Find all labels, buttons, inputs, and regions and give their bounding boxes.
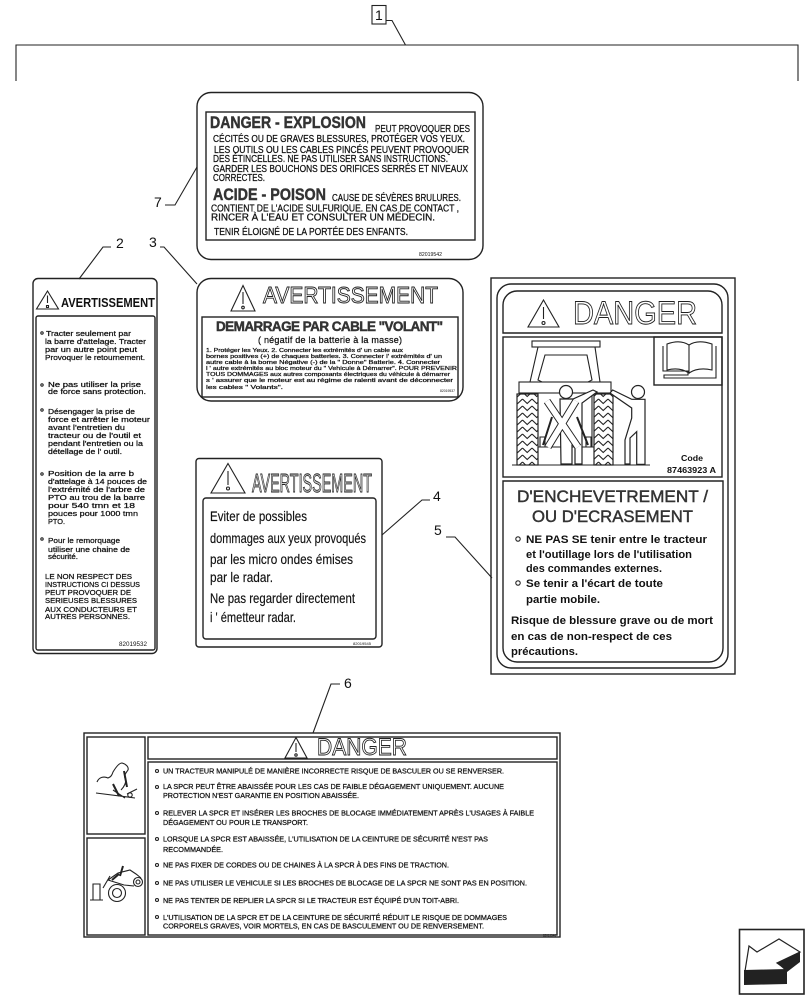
text block: radar warning [210,508,366,625]
part code: 82019545 [353,641,372,646]
text block: instructions: autre cable à la borne Négative (-) de la " Donne" Batterie. 4. Connecter [206,360,440,366]
text block: radar warning: i ' émetteur radar. [210,609,296,625]
text block: explosion warning: PEUT PROVOQUER DES [375,124,470,135]
part code: 82019537 [440,389,455,393]
icon: navigation arrow [740,930,804,994]
icon: warning triangle [528,300,559,327]
subheading: battery note: ( négatif de la batterie à la masse) [258,335,402,345]
callout: item 4 leader: 4 [433,488,441,504]
list: towing instructions: Position de la arre b [48,469,134,478]
list: rops instructions: PROTECTION N'EST GARANTIE EN POSITION ABAISSÉE. [163,791,359,800]
text block: consequence warning: SERIEUSES BLESSURES [45,596,137,605]
callout: item 4 leader [382,488,441,535]
list: towing instructions: l'extrémité de l'arbre de [48,485,145,494]
list: safety instructions: partie mobile. [526,594,600,606]
list: rops instructions: UN TRACTEUR MANIPULÉ DE MANIÈRE INCORRECTE RISQUE DE BASCULER OU SE RENVERSER. [163,766,504,776]
text block: radar warning: dommages aux yeux provoqués [210,530,366,546]
text panel: entanglement warning [503,481,723,662]
text block: explosion warning: GARDER LES BOUCHONS DES ORIFICES SERRÉS ET NIVEAUX [213,162,468,175]
list: towing instructions: tracteur ou de l'outil et [48,431,142,440]
callout: item 7 leader [154,167,197,210]
icon: warning triangle [285,738,307,758]
list: rops instructions [156,766,534,930]
list: rops instructions: LORSQUE LA SPCR EST ABAISSÉE, L'UTILISATION DE LA CEINTURE DE SÉCURITÉ N'EST PAS [163,834,488,844]
callout: item 1 with bracket: 1 [375,7,383,23]
list: towing instructions: d'attelage à 14 pouces de [48,477,147,486]
text block: risk statement: précautions. [511,646,578,658]
part code: 82019542 [419,252,442,258]
list: rops instructions: LA SPCR PEUT ÊTRE ABAISSÉE POUR LES CAS DE FAIBLE DÉGAGEMENT UNIQUEMENT. AUCUNE [163,782,504,791]
text block: acid warning: CAUSE DE SÉVÈRES BRULURES. [332,191,461,204]
text block: consequence warning: AUTRES PERSONNES. [45,612,130,621]
panel: label 5 danger entanglement [491,278,735,674]
callout: item 5 leader [434,522,492,578]
text block: instructions: TOUS DOMMAGES aux autres composants électriques du véhicule à démarrer [206,372,450,378]
text block: consequence warning: INSTRUCTIONS CI DESSUS [45,580,140,589]
list: rops instructions: RELEVER LA SPCR ET INSÉRER LES BROCHES DE BLOCAGE IMMÉDIATEMENT APRÈS L'USAGES À FAIBLE [163,808,534,818]
text block: consequence warning: LE NON RESPECT DES [45,572,132,581]
text block: explosion warning: LES OUTILS OU LES CABLES PINCÉS PEUVENT PROVOQUER [214,143,469,156]
callout: item 6 leader: 6 [344,675,352,691]
text block: risk statement: en cas de non-respect de ces [511,631,672,643]
text block: risk statement: Risque de blessure grave ou de mort [511,615,713,627]
icon: warning triangle [231,286,255,311]
list: towing instructions: PTO au trou de la barre [48,493,145,502]
heading: entanglement [517,487,708,526]
list: towing instructions: Pour le remorquage [48,536,120,545]
heading: avertissement outline: AVERTISSEMENT [252,468,372,498]
text block: consequence warning: AUX CONDUCTEURS ET [45,605,137,614]
panel: label 3 jump start [197,278,463,401]
list: safety instructions [516,534,708,606]
list: towing instructions: de force sans protection. [48,387,146,396]
text block: acid warning: CONTIENT DE L'ACIDE SULFURIQUE. EN CAS DE CONTACT , [211,204,459,214]
text block: explosion warning: CÉCITÉS OU DE GRAVES BLESSURES, PROTÉGER VOS YEUX. [213,132,465,145]
icon: tractor with rollbar [90,866,142,902]
text block: instructions: s ' assurer que le moteur est au régime de ralenti avant de déconnecter [206,378,453,384]
text block: instructions: l ' autre extrémités au bloc moteur du " Vehicule à Démarrer". POUR PREVENIR [206,366,457,372]
icon: manual book [654,337,722,385]
text block: explosion warning: CORRECTES. [213,173,265,184]
list: towing instructions: Désengager la prise de [48,407,135,416]
panel: label 7 danger explosion [197,92,483,260]
list: towing instructions: avant l'entretien du [48,423,125,432]
text block: explosion warning [213,124,470,184]
part code: 82019546 [543,934,556,938]
list: rops instructions: NE PAS FIXER DE CORDES OU DE CHAINES À LA SPCR À DES FINS DE TRACTION. [163,860,449,870]
list: towing instructions: force et arrêter le moteur [48,415,151,424]
list: rops instructions: NE PAS TENTER DE REPLIER LA SPCR SI LE TRACTEUR EST ÉQUIPÉ D'UN TOIT-ABRI. [163,896,459,905]
pictogram: tractor crush hazard [503,337,722,477]
part code [667,453,716,475]
heading: acide poison: ACIDE - POISON [213,186,326,204]
list: towing instructions: par un autre point peut [45,345,138,354]
list: safety instructions: des commandes externes. [526,563,662,575]
text block: acid warning: RINCER À L'EAU ET CONSULTER UN MÉDECIN. [211,210,435,224]
list: towing instructions: sécurité. [48,552,78,561]
text block: explosion warning: DES ÉTINCELLES. NE PAS UTILISER SANS INSTRUCTIONS. [213,152,448,165]
text block: risk statement [511,615,713,658]
heading: danger outline: DANGER [573,295,697,331]
list: towing instructions: la barre d'attelage. Tracter [45,337,147,346]
panel: label 2 avertissement [33,278,157,654]
text block: radar warning: par les micro ondes émises [210,551,353,567]
text block: radar warning: par le radar. [210,569,273,585]
list: towing instructions: PTO. [48,517,65,526]
callout: item 6 leader [313,675,352,733]
part code: 82019532 [119,641,147,648]
panel: label 6 rops danger [84,733,560,938]
callout: item 7 leader: 7 [154,194,162,210]
list: safety instructions: et l'outillage lors de l'utilisation [526,549,692,561]
part code: Code [681,453,703,463]
list: towing instructions: pour 540 tmn et 18 [48,501,135,510]
icon: overturning tractor [96,763,137,798]
list: rops instructions: RECOMMANDÉE. [163,845,223,854]
heading: avertissement outline: AVERTISSEMENT [263,282,438,308]
callout: item 1 with bracket [16,6,798,81]
callout: item 3 leader: 3 [149,234,157,250]
text block: instructions: les cables " Volants". [206,385,284,391]
list: towing instructions: pendant l'entretien ou la [48,439,144,448]
heading: danger explosion: DANGER - EXPLOSION [210,114,366,132]
icon: warning triangle [211,464,245,493]
text block: radar warning: Ne pas regarder directement [210,590,355,606]
list: towing instructions: détellage de l' outil. [48,447,122,456]
list: safety instructions: Se tenir a l'écart de toute [526,578,663,590]
list: towing instructions [41,329,151,561]
list: towing instructions: pouces pour 1000 tmn [48,509,138,518]
callout: item 2 leader [79,235,124,279]
text block: acid warning: TENIR ÉLOIGNÉ DE LA PORTÉE DES ENFANTS. [214,225,408,238]
text block: consequence warning: PEUT PROVOQUER DE [45,588,131,597]
panel: label 4 radar [196,458,382,647]
heading: danger outline: DANGER [317,734,407,761]
list: rops instructions: CORPORELS GRAVES, VOIR MORTELS, EN CAS DE BASCULEMENT OU DE RENVERSEMENT. [163,922,484,930]
text block: instructions: bornes positives (+) de chaques batteries. 3. Connecter l' extrémités d' un [206,354,442,360]
heading: jump start: DEMARRAGE PAR CABLE "VOLANT" [216,319,443,334]
list: towing instructions: Ne pas utiliser la prise [48,380,141,389]
icon: warning triangle [36,291,58,309]
callout: item 5 leader: 5 [434,522,442,538]
text block: instructions: 1. Protéger les Yeux. 2. Connecter les extrémités d' un cable aux [206,348,403,354]
callout: item 3 leader [149,234,197,284]
list: rops instructions: NE PAS UTILISER LE VEHICULE SI LES BROCHES DE BLOCAGE DE LA SPCR NE SONT PAS EN POSITION. [163,878,527,888]
list: rops instructions: DÉGAGEMENT OU POUR LE TRANSPORT. [163,818,308,827]
text block: consequence warning [45,572,140,621]
text block: acid warning [211,191,461,238]
heading: entanglement: D'ENCHEVETREMENT / [517,487,708,506]
callout: item 2 leader: 2 [116,235,124,251]
text block: radar warning: Eviter de possibles [210,508,307,524]
heading: avertissement: AVERTISSEMENT [61,295,155,310]
list: towing instructions: Tracter seulement par [46,329,132,338]
list: towing instructions: Provoquer le retournement. [45,353,145,362]
list: safety instructions: NE PAS SE tenir entre le tracteur [526,534,708,546]
list: rops instructions: L'UTILISATION DE LA SPCR ET DE LA CEINTURE DE SÉCURITÉ RÉDUIT LE RISQUE DE DOMMAGES [163,913,507,922]
part code: 87463923 A [667,465,716,475]
list: towing instructions: utiliser une chaine de [48,545,130,554]
text block: instructions [206,348,457,391]
heading: entanglement: OU D'ECRASEMENT [532,507,693,526]
